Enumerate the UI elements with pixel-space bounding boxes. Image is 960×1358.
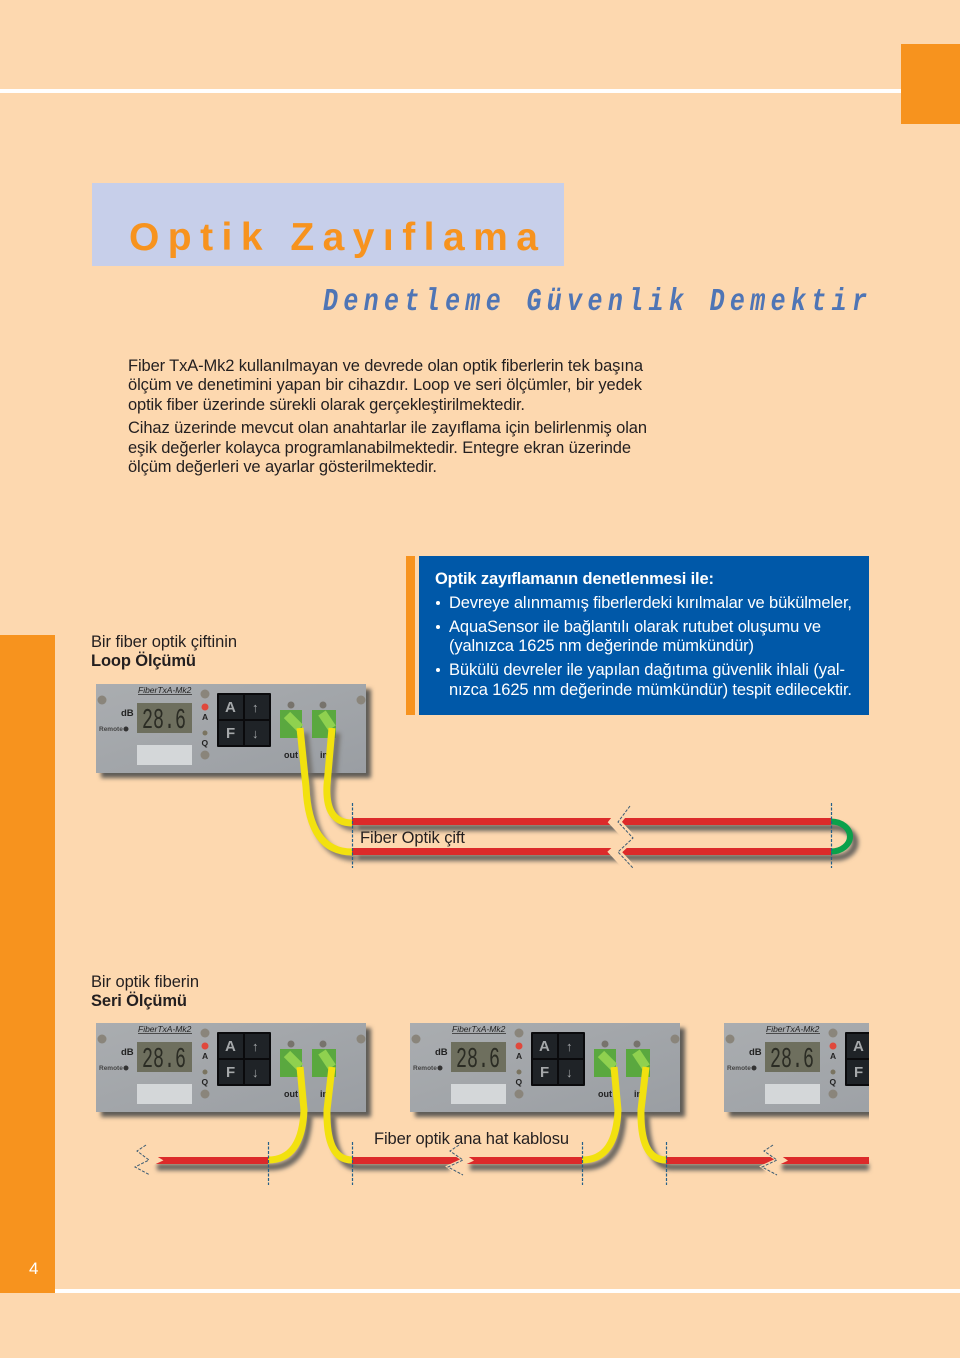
callout bullet 2: (yalnızca 1625 nm değerinde mümkündür)	[449, 637, 754, 655]
series heading: Bir optik fiberin	[91, 973, 199, 991]
callout bullet 3	[436, 661, 852, 699]
callout bullet 2	[436, 618, 821, 655]
device panel: series 1: Q	[202, 1077, 208, 1087]
callout bullet 3: nızca 1625 nm değerinde mümkündür) tespit edilecektir.	[449, 681, 852, 699]
callout bullet 2: AquaSensor ile bağlantılı olarak rutubet oluşumu ve	[449, 618, 821, 636]
device panel: series 1: F	[226, 1064, 235, 1081]
fiber pair diagram	[300, 728, 855, 868]
subtitle: Denetleme Güvenlik Demektir	[323, 285, 867, 320]
device panel: loop: ↑	[252, 700, 258, 715]
intro text: Cihaz üzerinde mevcut olan anahtarlar ile zayıflama için belirlenmiş olan	[128, 419, 647, 437]
device panel: series 2: in	[634, 1089, 642, 1099]
device panel: series 2: Remote	[413, 1065, 437, 1072]
callout panel	[419, 556, 869, 715]
intro text	[128, 357, 647, 476]
device panel: loop: dB	[121, 708, 134, 719]
device panel: series 3 (cropped)	[724, 1023, 869, 1120]
device panel: series 1: ↓	[252, 1065, 258, 1080]
device panel: series 1: ↑	[252, 1039, 258, 1054]
loop heading: Loop Ölçümü	[91, 651, 196, 670]
series heading	[91, 973, 199, 1010]
device panel: series 2: FiberTxA-Mk2	[452, 1024, 506, 1034]
device panel: series 3 (cropped): 28.6	[770, 1043, 814, 1076]
device panel: series 3 (cropped): A	[853, 1038, 864, 1055]
device panel: series 2: ↓	[566, 1065, 572, 1080]
loop heading	[91, 633, 237, 670]
device panel: loop: 28.6	[142, 704, 186, 737]
device panel: series 1: in	[320, 1089, 328, 1099]
callout bullet 1: Devreye alınmamış fiberlerdeki kırılmalar ve bükülmeler,	[449, 594, 852, 612]
device panel: series 3 (cropped): F	[854, 1064, 863, 1081]
callout accent bar	[406, 556, 415, 715]
device panel: loop: out	[284, 750, 298, 760]
callout heading: Optik zayıflamanın denetlenmesi ile:	[435, 570, 714, 588]
device panel: loop: ↓	[252, 726, 258, 741]
orange corner tab	[901, 44, 960, 124]
intro text: Fiber TxA-Mk2 kullanılmayan ve devrede olan optik fiberlerin tek başına	[128, 357, 644, 375]
series fiber line diagram	[135, 1067, 869, 1185]
orange side bar	[0, 635, 55, 1293]
title: Optik Zayıflama	[129, 216, 538, 259]
device panel: loop: FiberTxA-Mk2	[138, 685, 192, 695]
intro text: optik fiber üzerinde sürekli olarak gerçekleştirilmektedir.	[128, 396, 525, 414]
intro text: ölçüm ve denetimini yapan bir cihazdır. Loop ve seri ölçümler, bir yedek	[128, 376, 643, 394]
series heading: Seri Ölçümü	[91, 991, 187, 1010]
loop heading: Bir fiber optik çiftinin	[91, 633, 237, 651]
device panel: series 1: FiberTxA-Mk2	[138, 1024, 192, 1034]
device panel: series 2: ↑	[566, 1039, 572, 1054]
device panel: series 1: A	[225, 1038, 236, 1055]
device panel: series 2	[410, 1023, 685, 1117]
device panel: series 3 (cropped): FiberTxA-Mk2	[766, 1024, 820, 1034]
device panel: loop: A	[225, 699, 236, 716]
device panel: loop: F	[226, 725, 235, 742]
intro text: ölçüm değerleri ve ayarlar gösterilmektedir.	[128, 458, 437, 476]
device panel: loop: in	[320, 750, 328, 760]
device panel: loop: A	[202, 712, 208, 722]
device panel: series 1	[96, 1023, 371, 1117]
device panel: series 3 (cropped): Remote	[727, 1065, 751, 1072]
page number: 4	[29, 1259, 38, 1278]
device panel: series 2: A	[516, 1051, 522, 1061]
device panel: series 1: 28.6	[142, 1043, 186, 1076]
device panel: series 2: A	[539, 1038, 550, 1055]
intro text: eşik değerler kolayca programlanabilmektedir. Entegre ekran üzerinde	[128, 439, 631, 457]
device panel: series 2: Q	[516, 1077, 522, 1087]
callout bullet 3: Bükülü devreler ile yapılan dağıtıma güvenlik ihlali (yal-	[449, 661, 845, 679]
device panel: series 1: A	[202, 1051, 208, 1061]
title box	[92, 183, 564, 266]
device panel: series 2: 28.6	[456, 1043, 500, 1076]
fiber pair label: Fiber Optik çift	[360, 829, 465, 847]
device panel: series 1: out	[284, 1089, 298, 1099]
device panel: series 1: Remote	[99, 1065, 123, 1072]
device panel: series 2: F	[540, 1064, 549, 1081]
device panel: series 3 (cropped): dB	[749, 1047, 762, 1058]
device panel: series 2: out	[598, 1089, 612, 1099]
device panel: loop: Q	[202, 738, 208, 748]
device panel: series 3 (cropped): Q	[830, 1077, 836, 1087]
series fiber label: Fiber optik ana hat kablosu	[374, 1130, 569, 1148]
device panel: loop: Remote	[99, 726, 123, 733]
device panel: series 1: dB	[121, 1047, 134, 1058]
device panel: series 3 (cropped): A	[830, 1051, 836, 1061]
device panel: series 2: dB	[435, 1047, 448, 1058]
device panel: loop	[96, 684, 371, 778]
